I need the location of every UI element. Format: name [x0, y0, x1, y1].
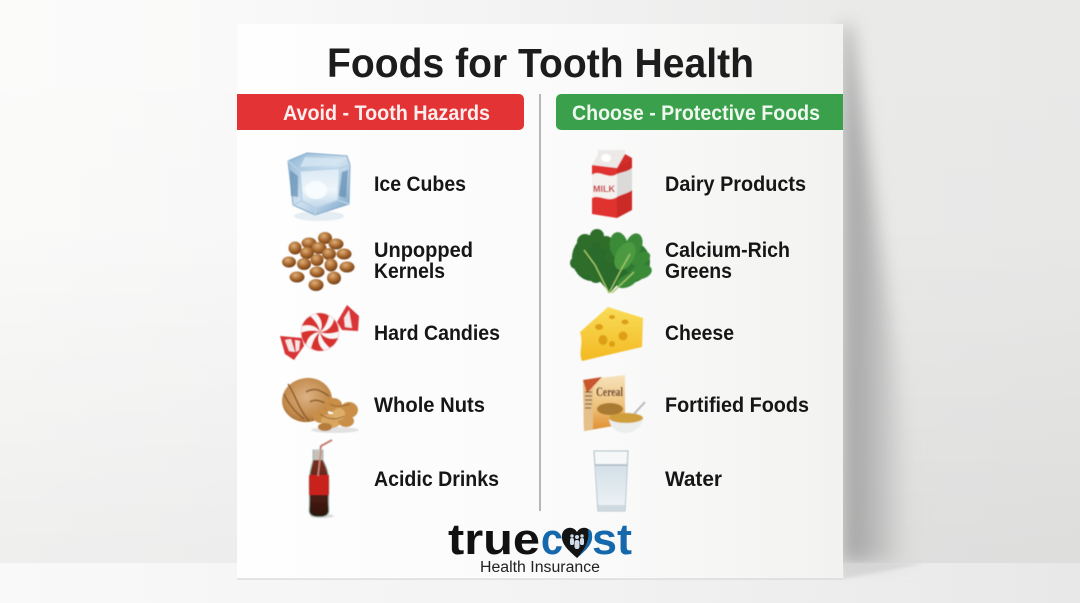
label: Kernels	[374, 260, 445, 283]
wordmark: true	[448, 515, 540, 564]
wordmark: c	[541, 515, 563, 564]
icon: walnut	[279, 375, 359, 433]
item: calcium-rich greens	[570, 229, 790, 293]
choose header	[556, 94, 843, 130]
label: Fortified Foods	[665, 394, 809, 417]
logo: truecost health insurance	[448, 515, 632, 576]
label: Cheese	[665, 322, 734, 345]
item: whole nuts	[279, 375, 485, 433]
icon: cola bottle	[309, 440, 334, 518]
label: Ice Cubes	[374, 173, 466, 196]
label: Unpopped	[374, 239, 473, 262]
floor	[0, 563, 1080, 603]
item: water	[594, 451, 722, 511]
poster board	[237, 24, 843, 579]
label: Whole Nuts	[374, 394, 485, 417]
icon: cereal box and bowl	[583, 375, 645, 433]
icon: kale and spinach	[570, 229, 653, 293]
icon: milk carton: MILK	[593, 184, 615, 195]
icon: milk carton	[592, 150, 632, 218]
avoid header	[237, 94, 524, 130]
item: hard candies	[280, 305, 500, 360]
label: Acidic Drinks	[374, 468, 499, 491]
icon: peppermint candy	[280, 305, 359, 360]
item: cheese	[580, 307, 734, 361]
panel: avoid column	[237, 94, 524, 518]
tagline: Health Insurance	[480, 559, 600, 576]
item: acidic drinks	[309, 440, 499, 518]
icon: kernels	[282, 232, 354, 291]
icon: cereal box and bowl: Cereal	[596, 385, 623, 399]
avoid header: Avoid - Tooth Hazards	[283, 102, 490, 125]
title: Foods for Tooth Health	[327, 40, 754, 86]
label: Hard Candies	[374, 322, 500, 345]
icon: heart with family	[562, 528, 592, 558]
item: dairy products	[592, 150, 806, 218]
label: Greens	[665, 260, 732, 283]
board bottom edge	[237, 578, 843, 580]
icon: ice cube	[288, 153, 350, 221]
item: ice cubes	[288, 153, 466, 221]
item: unpopped kernels	[282, 232, 473, 291]
choose header: Choose - Protective Foods	[572, 102, 820, 125]
label: Dairy Products	[665, 173, 806, 196]
panel: choose column	[556, 94, 843, 511]
wordmark: st	[592, 515, 632, 564]
column divider	[539, 94, 541, 511]
item: fortified foods	[583, 375, 809, 433]
label: Water	[665, 468, 722, 491]
board shadow	[843, 24, 925, 579]
icon: glass of water	[594, 451, 628, 511]
label: Calcium-Rich	[665, 239, 790, 262]
icon: cheese wedge	[580, 307, 643, 361]
